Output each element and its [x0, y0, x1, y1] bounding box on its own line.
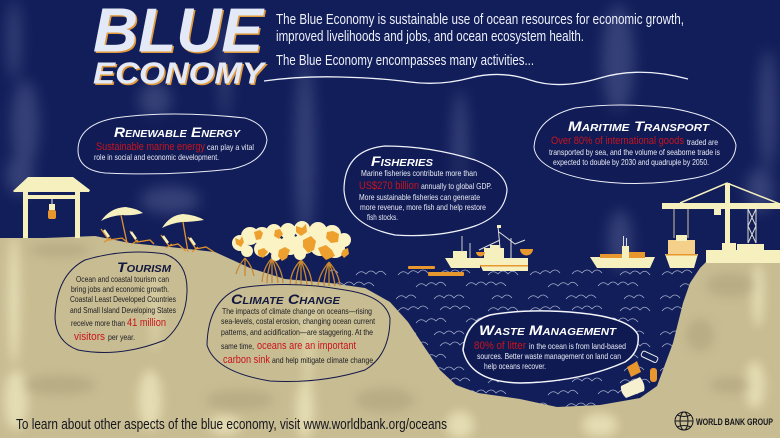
waste items: [621, 350, 659, 398]
body text: traded are: [687, 137, 718, 147]
icon: lantern: [48, 199, 56, 219]
body text: carbon sink: [223, 354, 270, 366]
body text: 80% of litter: [474, 340, 526, 352]
title: Blue Economy: ECONOMY: [93, 56, 268, 90]
body text: receive more than: [71, 318, 125, 328]
beach hut: [13, 177, 90, 238]
body text: and help mitigate climate change.: [272, 355, 375, 365]
heading: Climate Change: [231, 291, 340, 307]
body text: same time,: [221, 341, 254, 351]
panel: fisheries: [344, 146, 507, 236]
body text: More sustainable fisheries can generate: [359, 192, 480, 202]
body text: The impacts of climate change on oceans—rising: [222, 306, 372, 316]
body text: more revenue, more fish and help restore: [360, 202, 486, 212]
body text: Over 80% of international goods: [551, 135, 684, 147]
icon: globe: [675, 412, 693, 430]
title: Blue Economy: ECONOMY: [94, 57, 269, 92]
panel: renewable energy: [78, 114, 267, 174]
container ship: [590, 236, 655, 268]
divider line: [264, 72, 688, 85]
body text: sources. Better waste management on land can: [477, 351, 621, 361]
body text: Coastal Least Developed Countries: [70, 294, 176, 304]
body text: [359, 168, 492, 222]
sand seabed: [0, 235, 780, 438]
body text: in the ocean is from land-based: [529, 341, 626, 351]
footer link text: To learn about other aspects of the blue economy, visit www.worldbank.org/oceans: [16, 416, 447, 433]
body text: visitors: [74, 331, 105, 343]
body text: fish stocks.: [367, 212, 398, 222]
body text: [70, 274, 176, 343]
body text: Marine fisheries contribute more than: [361, 168, 477, 178]
body text: [221, 306, 376, 366]
panel: climate change: [207, 284, 390, 382]
body text: [549, 135, 720, 167]
panel: maritime transport: [534, 105, 736, 184]
heading: Renewable Energy: [114, 124, 241, 140]
body text: Sustainable marine energy: [96, 141, 205, 153]
body text: US$270 billion: [359, 180, 419, 192]
World Bank Group logo: [675, 412, 773, 430]
body text: 41 million: [127, 317, 166, 329]
title: Blue Economy: [93, 0, 269, 92]
body text: expected to double by 2030 and quadruple by 2050.: [553, 157, 709, 167]
panel: waste management: [463, 311, 638, 383]
body text: can play a vital: [207, 142, 254, 152]
body text: patterns, and acidification—are staggering. At the: [221, 327, 373, 337]
heading: Fisheries: [371, 153, 433, 169]
panel: tourism: [55, 252, 187, 352]
mangrove trees: [232, 221, 351, 286]
fishing boats: [408, 225, 533, 276]
body text: transported by sea, and the volume of seaborne trade is: [549, 147, 720, 157]
intro text: [276, 11, 684, 69]
body text: Ocean and coastal tourism can: [76, 274, 169, 284]
intro text: improved livelihoods and jobs, and ocean ecosystem health.: [276, 28, 584, 45]
body text: [474, 340, 626, 371]
port crane and dock: [662, 183, 780, 268]
title: Blue Economy: BLUE: [94, 0, 266, 67]
body text: bring jobs and economic growth.: [71, 284, 169, 294]
ocean waves: [330, 268, 700, 408]
body text: annually to global GDP.: [421, 181, 492, 191]
beach umbrellas and chairs: [101, 207, 214, 252]
body text: and Small Island Developing States: [70, 305, 176, 315]
body text: oceans are an important: [257, 340, 356, 352]
heading: Waste Management: [479, 322, 617, 338]
heading: Maritime Transport: [568, 118, 710, 134]
body text: role in social and economic development.: [94, 152, 219, 162]
body text: sea-levels, costal erosion, changing ocean current: [221, 316, 376, 326]
heading: Tourism: [117, 259, 172, 275]
body text: [94, 141, 254, 162]
body text: per year.: [108, 332, 135, 342]
intro text: The Blue Economy encompasses many activities...: [276, 52, 534, 69]
body text: help oceans recover.: [484, 361, 546, 371]
